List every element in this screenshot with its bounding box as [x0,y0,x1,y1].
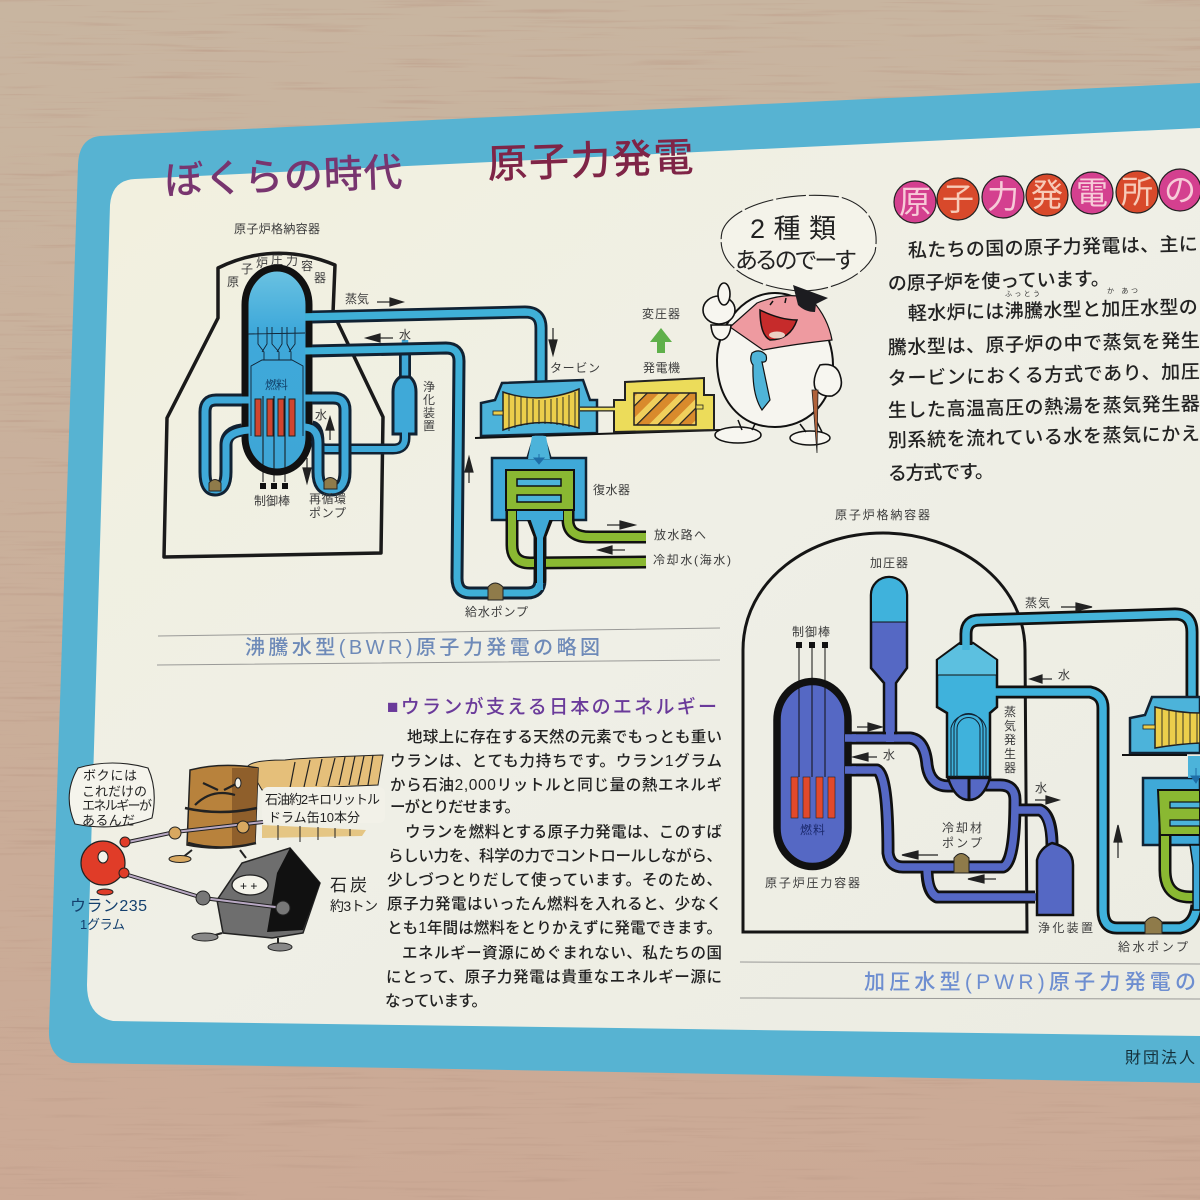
PWR labels: 発 [1004,733,1016,747]
mascot pointing hand [703,283,735,340]
intro text block: 別系統を流れている水を蒸気にかえ [888,423,1200,452]
uranium text block: なっています。 [385,992,487,1010]
speech bubble: 2種類 [750,214,836,244]
oil label: ドラム缶10本分 [268,810,360,825]
BWR feed water pipe [305,348,540,593]
BWR labels: 炉 [256,256,268,270]
PWR labels: 器 [1004,761,1016,775]
BWR containment outline [164,253,383,557]
BWR labels: 化 [423,393,435,407]
BWR labels: 復水器 [593,482,630,497]
BWR labels: 水 [399,328,411,342]
BWR labels: 置 [423,419,435,433]
uranium text block: から石油2,000リットルと同じ量の熱エネルギ [390,776,722,794]
character labels: 石炭 [330,876,367,895]
uranium text block: ーがとりだせます。 [390,797,520,816]
PWR labels: 水 [1035,781,1047,795]
uranium text block: 地球上に存在する天然の元素でもっとも重い [407,728,722,746]
speech bubble [69,763,154,828]
BWR labels: 変圧器 [642,306,680,321]
BWR labels: 装 [423,406,435,420]
oil label [262,787,385,825]
BWR labels: 原 [227,275,239,289]
speech bubble: ボクには [83,768,137,783]
BWR labels: 発電機 [643,361,680,375]
uranium text block: とも1年間は燃料をとりかえずに発電できます。 [387,919,722,937]
mascot body [717,293,833,427]
white panel [87,128,1200,1036]
intro text block: る方式です。 [888,461,994,485]
speech bubble: あるんだ [82,813,135,828]
BWR purifier [316,340,416,449]
pressurizer [871,577,907,742]
heading circles: 電 [1076,175,1108,211]
intro text block: 私たちの国の原子力発電は、主に [908,233,1198,262]
coolant pump [954,854,969,873]
oil label: 石油約2キロリットル [265,792,380,807]
PWR labels: 冷却材 [942,821,982,835]
BWR labels: 放水路へ [654,527,706,542]
intro text block [888,233,1200,485]
condenser [492,435,646,590]
steam generator [937,643,997,800]
BWR labels: 力 [286,254,298,268]
speech bubble: これだけの [82,784,147,799]
PWR labels: 水 [1058,668,1070,682]
uranium text block [385,728,722,1010]
purifier [1037,843,1073,915]
BWR diagram [164,221,731,619]
mascot and speech bubble [703,195,876,453]
mascot face [730,296,832,350]
PWR containment dome [743,533,1027,932]
BWR recirculation loops [205,398,345,490]
BWR labels: 給水ポンプ [465,605,528,619]
PWR flow arrows [853,603,1122,883]
PWR labels: 蒸 [1004,705,1016,719]
title: 原子力発電 [487,136,694,187]
BWR reactor pressure vessel [245,268,309,489]
PWR labels: 制御棒 [792,624,830,639]
BWR labels: タービン [550,361,600,375]
PWR labels: 原子炉圧力容器 [765,876,860,890]
coal character: + + [240,879,257,893]
BWR labels: 浄 [423,380,435,394]
PWR labels: 気 [1004,718,1016,733]
character labels: 約3トン [330,898,378,914]
recirculation pumps [209,478,337,491]
intro text block: 生した高温高圧の熱湯を蒸気発生器 [888,393,1200,422]
footer organisation text: 財団法人 [1125,1049,1195,1067]
BWR labels: 再循環 [309,492,346,506]
heading circles: 発 [1031,177,1063,213]
mascot hat [793,285,828,312]
turbine shaft [580,406,636,412]
transformer arrow [650,328,672,353]
BWR labels [227,221,731,619]
character labels: ウラン235 [70,897,147,915]
uranium section heading: ■ウランが支える日本のエネルギー [387,696,717,718]
intro text block: 騰水型は、原子炉の中で蒸気を発生 [888,330,1200,359]
speech bubble [721,195,876,291]
heading circles: 子 [942,181,974,217]
intro text block: 軽水炉には沸騰水型と加圧水型の [908,296,1198,325]
PWR labels: 原子炉格納容器 [835,507,930,522]
PWR condenser partial [1143,756,1200,910]
uranium text block: にとって、原子力発電は貴重なエネルギー源に [386,968,722,986]
pull rods [128,822,283,908]
uranium text block: 原子力発電はいったん燃料を入れると、少なく [387,895,722,913]
heading circles [894,169,1200,223]
uranium text block: エネルギー資源にめぐまれない、私たちの国 [402,944,722,962]
BWR caption [157,628,720,665]
generator [580,378,714,432]
BWR labels: 制御棒 [254,493,290,508]
title [164,136,694,203]
BWR labels: ポンプ [309,506,346,520]
PWR caption [740,962,1200,999]
main oil drum character [169,765,258,862]
PWR coolant loops [845,738,1052,897]
coal character [192,848,320,951]
uranium character [81,837,130,895]
PWR reactor vessel [777,642,856,867]
BWR labels: 器 [314,271,326,285]
BWR labels: 原子炉格納容器 [234,221,320,236]
PWR labels: 水 [883,748,895,762]
heading circles: 所 [1121,174,1153,210]
mascot tie [751,351,770,410]
title: ぼくらの時代 [164,152,403,203]
mascot cane [812,390,818,453]
BWR steam pipe [305,312,541,386]
PWR labels: 蒸気 [1025,595,1050,610]
heading circles: 原 [899,184,931,220]
speech bubble: エネルギーが [82,798,152,813]
PWR caption: 加圧水型(PWR)原子力発電の [864,971,1196,994]
heading circles: 力 [987,179,1019,215]
turbine [475,380,720,438]
hands [169,821,290,915]
BWR labels: 蒸気 [345,291,369,306]
BWR labels: 冷却水(海水) [653,553,731,567]
PWR labels: 燃料 [800,822,825,837]
blue board [49,83,1200,1083]
intro text block: タービンにおくる方式であり、加圧 [888,361,1200,390]
intro text block: か あつ [1107,287,1138,295]
BWR labels: 圧 [271,253,283,267]
PWR feed pump [1145,917,1162,934]
heading circles: の [1164,172,1196,208]
intro text block: の原子炉を使っています。 [888,268,1110,295]
character labels: 1グラム [80,917,125,932]
PWR feed water pipe [992,692,1197,928]
uranium text block: らしい力を、科学の力でコントロールしながら、 [388,846,722,865]
uranium text block: ウランを燃料とする原子力発電は、このすば [405,823,722,841]
BWR labels: 子 [241,262,253,276]
intro text block: ふっとう [1005,290,1040,298]
cartoon: energy comparison [69,755,385,951]
character labels [70,876,378,932]
BWR caption: 沸騰水型(BWR)原子力発電の略図 [245,636,600,659]
PWR steam pipe [966,614,1192,698]
PWR labels: 給水ポンプ [1118,940,1188,954]
BWR labels: 容 [301,259,313,273]
uranium text block: 少しづつとりだして使っています。そのため、 [387,871,722,889]
PWR labels: ポンプ [942,836,982,850]
PWR labels [765,507,1188,954]
BWR flow arrows [303,298,635,554]
PWR labels: 生 [1004,747,1016,761]
BWR labels: 水 [315,408,327,422]
uranium text block: ウランは、とても力持ちです。ウラン1グラム [390,752,722,770]
BWR labels: 燃料 [265,377,288,392]
oil drum row [248,755,383,842]
PWR diagram [743,507,1200,954]
speech bubble: あるのでーす [735,247,857,273]
mascot cane hand [814,364,841,396]
mascot feet [715,418,830,445]
PWR labels: 浄化装置 [1038,921,1093,935]
feed water pump [488,583,503,600]
PWR turbine partial [1122,697,1200,755]
PWR labels: 加圧器 [870,556,908,570]
